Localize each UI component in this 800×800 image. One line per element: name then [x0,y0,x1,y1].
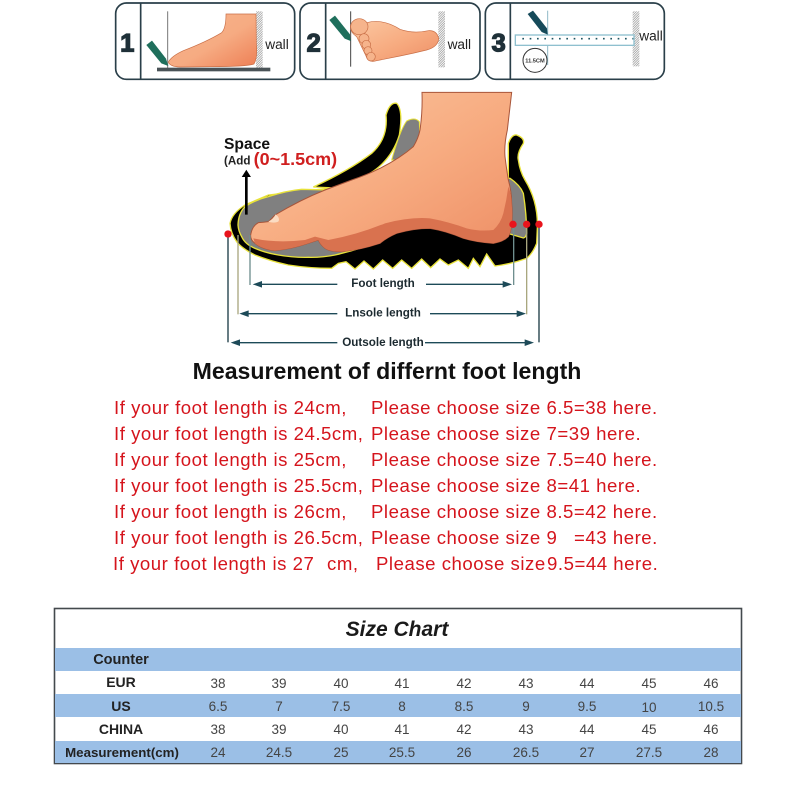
space label: Space [224,136,270,153]
size advice list: If your foot length is 26.5cm, [114,527,363,548]
EUR row [210,676,719,691]
row labels: Counter [93,652,149,668]
CHINA row: 45 [641,722,657,737]
row labels: US [111,698,131,714]
space arrow [242,170,250,214]
shoe outsole [230,135,537,269]
Measurement row: 28 [703,745,719,760]
Measurement row [210,745,719,760]
measurement circle [523,48,547,72]
foot sole shading [253,187,512,252]
CHINA row: 40 [333,722,349,737]
CHINA row: 41 [394,722,410,737]
panel: step 2 [300,3,480,79]
step number 2: 2 [307,30,321,58]
size chart table [54,608,742,764]
size advice list: Please choose size 7.5=40 here. [371,449,658,470]
CHINA row: 44 [579,722,595,737]
EUR row: 44 [579,676,595,691]
size advice list: If your foot length is 24.5cm, [114,423,363,444]
US row: 8 [398,699,406,714]
insole heel [500,178,527,238]
space label: (0~1.5cm) [254,149,337,169]
EUR row: 41 [394,676,410,691]
US row: 10.5 [698,699,724,714]
measurement guide lines [228,225,539,342]
row labels: Measurement(cm) [65,745,179,760]
EUR row: 42 [456,676,472,691]
Measurement row: 24 [210,745,226,760]
panel: step 1 [116,3,295,79]
icon: foot top view [350,20,439,61]
step number 1: 1 [120,30,134,58]
size advice list: Please choose size [376,553,546,574]
size advice list: Please choose size 6.5=38 here. [371,397,658,418]
Measurement row: 27.5 [636,745,662,760]
CHINA row: 43 [518,722,534,737]
Measurement row: 26.5 [513,745,539,760]
EUR row: 39 [271,676,287,691]
size advice list: If your foot length is 27 [113,553,314,574]
Measurement row: 25.5 [389,745,415,760]
row labels [65,652,179,760]
US row: 6.5 [209,699,227,714]
US row: 9 [522,699,530,714]
EUR row: 38 [210,676,226,691]
insole length arrow: Lnsole length [345,307,421,320]
CHINA row: 39 [271,722,287,737]
icon: pencil [329,16,351,41]
size advice list: Please choose size 8.5=42 here. [371,501,658,522]
size advice list: If your foot length is 25cm, [114,449,347,470]
CHINA row [210,722,719,737]
US row: 9.5 [578,699,596,714]
row labels: EUR [106,674,136,690]
row bands [55,648,741,671]
wall label: wall [447,37,471,52]
panel: step 3: 11.5CM [525,58,545,64]
size advice list: Please choose size 7=39 here. [371,423,641,444]
size advice list: Please choose size 9 [371,527,557,548]
size advice list: 9.5=44 here. [547,553,658,574]
US row: 10 [641,700,657,715]
measurement points [224,221,543,238]
icon: foot side view [168,14,257,67]
insole length arrow [239,307,526,320]
US row: 7 [275,699,283,714]
size advice list: cm, [327,553,359,574]
outsole length arrow [231,336,534,349]
toes [351,19,375,61]
diagram: shoe and foot measurement [224,92,543,349]
ruler [515,35,634,45]
space label: (Add [224,154,251,167]
foot [251,92,512,252]
US row: 8.5 [455,699,473,714]
EUR row: 43 [518,676,534,691]
size advice list: If your foot length is 24cm, [114,397,347,418]
icon: pencil [528,11,548,35]
EUR row: 46 [703,676,719,691]
foot length arrow [253,277,512,290]
heading: Measurement of differnt foot length [193,358,581,384]
size advice list [113,397,658,574]
toe highlight [268,214,279,223]
size advice list: Please choose size 8=41 here. [371,475,641,496]
size advice list: If your foot length is 25.5cm, [114,475,363,496]
wall label: wall [638,29,663,44]
wall label: wall [264,37,289,52]
icon: pencil [146,41,168,66]
table title: Size Chart [346,618,449,641]
Measurement row: 26 [456,745,472,760]
shoe upper tongue [313,103,401,188]
Measurement row: 25 [333,745,349,760]
step number 3: 3 [492,30,506,58]
size advice list: =43 here. [574,527,658,548]
insole front [238,189,377,257]
foot length arrow: Foot length [351,277,415,290]
Measurement row: 24.5 [266,745,292,760]
size advice list: If your foot length is 26cm, [114,501,347,522]
US row [209,699,724,715]
EUR row: 45 [641,676,657,691]
space label [224,136,337,169]
row labels: CHINA [99,721,143,737]
outsole length arrow: Outsole length [342,336,424,349]
panel: step 3 [485,3,664,79]
US row: 7.5 [332,699,350,714]
CHINA row: 42 [456,722,472,737]
insole back tab [392,119,420,160]
Measurement row: 27 [579,745,595,760]
EUR row: 40 [333,676,349,691]
CHINA row: 46 [703,722,719,737]
CHINA row: 38 [210,722,226,737]
